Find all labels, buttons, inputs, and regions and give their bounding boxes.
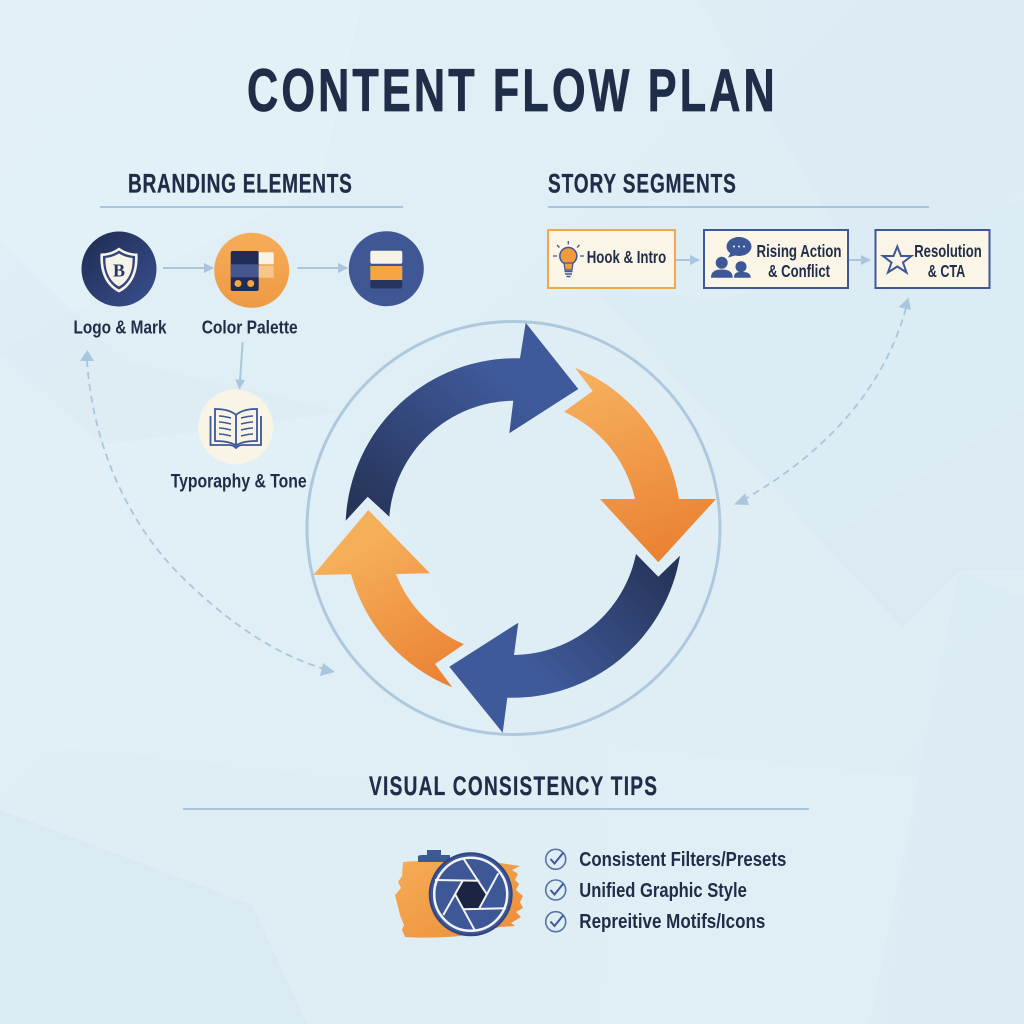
arrow: hook to rising action <box>676 259 699 261</box>
icon: logo and mark shield <box>82 232 156 306</box>
box: resolution and cta <box>876 230 990 288</box>
box: hook and intro: Hook & Intro <box>587 247 666 267</box>
arrow: right orange <box>564 368 716 562</box>
icon: people with speech bubble <box>711 237 752 278</box>
arrow: dashed link from logo to cycle <box>80 350 335 676</box>
label: color palette: Color Palette <box>202 316 298 338</box>
arrow: logo to palette <box>163 267 213 269</box>
label: typography and tone: Typoraphy & Tone <box>171 472 307 492</box>
box: rising action and conflict <box>704 230 848 288</box>
item: consistent filters: Consistent Filters/Presets <box>579 849 786 871</box>
heading: branding elements: BRANDING ELEMENTS <box>128 168 352 198</box>
arrow: palette to third swatch <box>297 267 347 269</box>
icon: camera with aperture <box>395 850 523 938</box>
arrow: left orange <box>313 510 464 687</box>
diagram: content cycle <box>307 322 720 734</box>
icon: star <box>883 246 912 272</box>
icon: open book <box>198 390 273 464</box>
arrow: bottom dark blue <box>449 554 680 733</box>
box: rising action and conflict: & Conflict <box>768 261 830 281</box>
icon: stacked swatches <box>349 231 424 306</box>
label: logo and mark: Logo & Mark <box>74 316 167 338</box>
arrow: rising action to resolution <box>849 259 870 261</box>
checklist: consistency tips <box>546 849 786 933</box>
item: repetitive motifs: Repreitive Motifs/Icons <box>579 911 765 933</box>
arrow: top blue <box>346 323 578 521</box>
box: resolution and cta: & CTA <box>928 261 966 281</box>
arrow: dashed link from resolution to cycle <box>734 298 911 505</box>
icon: logo and mark shield: B <box>113 260 125 280</box>
icon: light bulb <box>553 241 584 276</box>
arrow: palette to typography <box>240 342 243 388</box>
title: CONTENT FLOW PLAN <box>247 58 775 125</box>
heading: visual consistency tips: VISUAL CONSISTENCY TIPS <box>369 771 657 801</box>
item: unified graphic style: Unified Graphic Style <box>579 880 747 902</box>
box: hook and intro <box>548 230 675 288</box>
box: rising action and conflict: Rising Action <box>756 241 842 261</box>
box: resolution and cta: Resolution <box>914 241 982 261</box>
icon: color palette <box>214 233 289 308</box>
heading: story segments: STORY SEGMENTS <box>548 168 736 198</box>
